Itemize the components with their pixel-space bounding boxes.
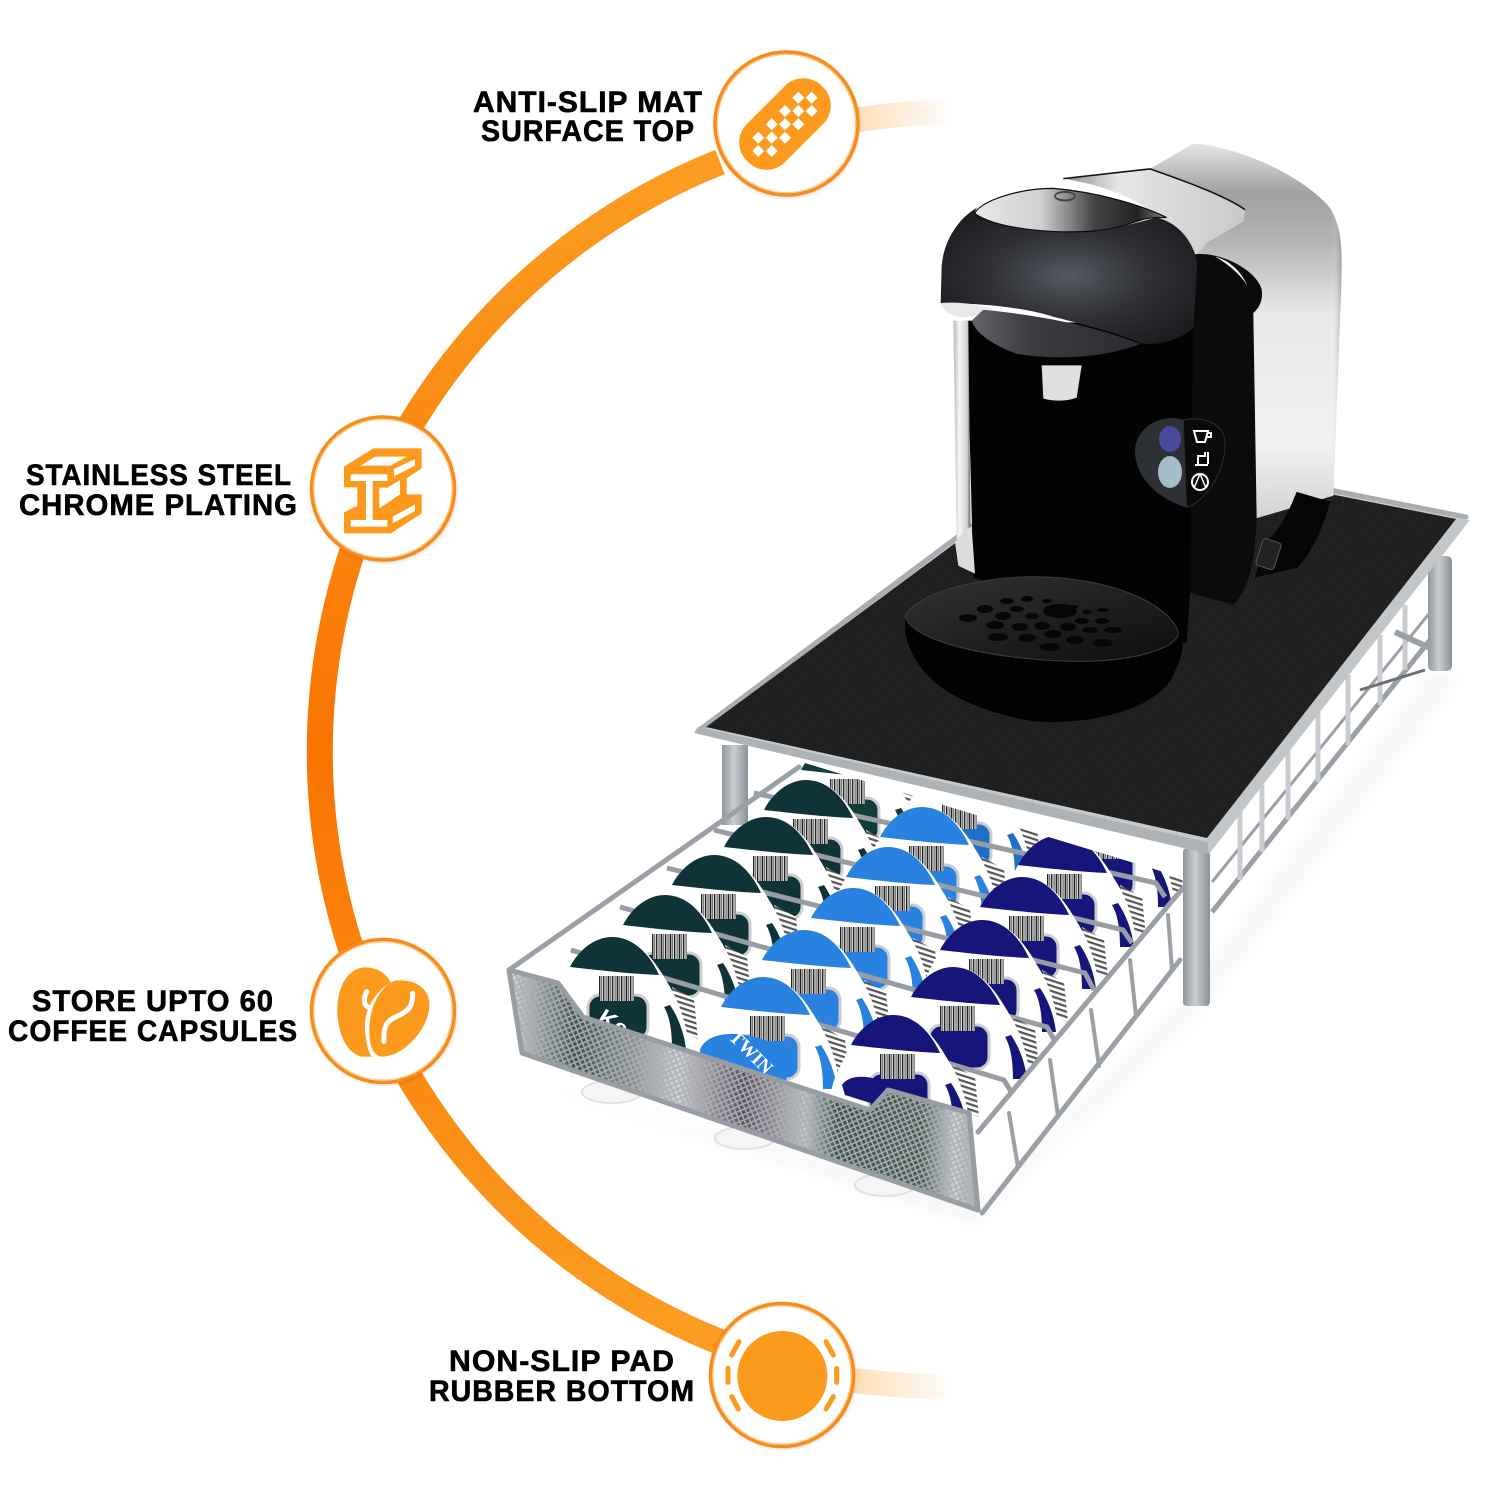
capsule row 4 <box>603 895 1056 1089</box>
control panel left half <box>1135 418 1187 507</box>
callout: stainless steel <box>19 417 456 562</box>
capsule row 1 <box>744 780 1165 957</box>
coffee machine <box>905 144 1342 722</box>
top faded arc tail <box>850 112 955 121</box>
callout: coffee capsules <box>8 940 456 1084</box>
head cap <box>941 208 1197 344</box>
capsule row 5: TWIN <box>724 1027 777 1079</box>
drawer wheels <box>582 1081 915 1196</box>
back row capsules <box>801 763 1182 907</box>
label: stainless steel: CHROME PLATING <box>19 489 298 522</box>
orange feature arc <box>320 162 720 1342</box>
rear lid panel <box>1063 169 1245 255</box>
nozzle hood <box>972 310 1140 357</box>
product photo: drawer stand and coffee machine <box>509 144 1470 1225</box>
icon: bandage <box>728 67 842 181</box>
label: anti-slip mat: ANTI-SLIP MAT <box>473 86 703 119</box>
label: coffee capsules: STORE UPTO 60 <box>32 985 274 1018</box>
bottom faded arc tail <box>850 1380 955 1387</box>
icon ring: steel beam <box>312 417 456 562</box>
front right leg <box>1183 848 1210 1006</box>
icon ring: rubber pad <box>710 1304 855 1448</box>
drawer side rails <box>509 767 1183 1213</box>
lid logo <box>1055 192 1075 200</box>
machine black front <box>967 321 1193 644</box>
capsule row 5 <box>570 937 1012 1117</box>
front mesh panel <box>509 970 978 1210</box>
icon: steel beam <box>344 448 422 533</box>
machine base foot <box>1255 492 1330 577</box>
label: coffee capsules: COFFEE CAPSULES <box>8 1015 298 1048</box>
icon ring: bandage <box>715 52 859 197</box>
spout <box>1042 365 1082 401</box>
tray top <box>905 577 1178 661</box>
stand side frame <box>1212 605 1432 912</box>
label: non-slip pad: RUBBER BOTTOM <box>429 1375 695 1408</box>
side gloss highlight <box>1215 256 1247 286</box>
label: non-slip pad <box>429 1345 695 1408</box>
anti-slip mat top <box>694 443 1470 854</box>
label: non-slip pad: NON-SLIP PAD <box>449 1345 675 1378</box>
capsule row 2 <box>704 817 1132 999</box>
machine black side panel <box>1190 254 1262 605</box>
drip tray holes <box>959 596 1122 651</box>
machine silver body <box>1150 144 1342 519</box>
front left leg <box>722 745 748 825</box>
label: coffee capsules <box>8 985 298 1048</box>
tray bowl <box>905 616 1183 722</box>
icon: rubber pad <box>728 1331 837 1421</box>
water window <box>953 321 971 541</box>
callout: anti-slip mat <box>473 52 859 197</box>
label: stainless steel: STAINLESS STEEL <box>26 459 292 492</box>
label: anti-slip mat <box>473 86 703 148</box>
power switch <box>1255 538 1282 570</box>
label: anti-slip mat: SURFACE TOP <box>481 115 695 148</box>
capsule row 3 <box>652 855 1094 1042</box>
callout: non-slip pad <box>429 1304 855 1448</box>
lid top <box>975 188 1167 232</box>
capsule row 5: Ke <box>593 1004 633 1043</box>
control panel icons <box>1158 426 1211 490</box>
back right leg <box>1428 556 1452 671</box>
head highlight <box>941 303 1000 318</box>
icon ring: coffee beans <box>312 940 456 1084</box>
control panel right half <box>1183 419 1225 507</box>
label: stainless steel <box>19 459 298 522</box>
capsules and cross rails <box>570 763 1182 1117</box>
soft floor shadow <box>530 670 1460 1225</box>
icon: coffee beans <box>337 967 429 1057</box>
window base highlight <box>955 527 975 574</box>
